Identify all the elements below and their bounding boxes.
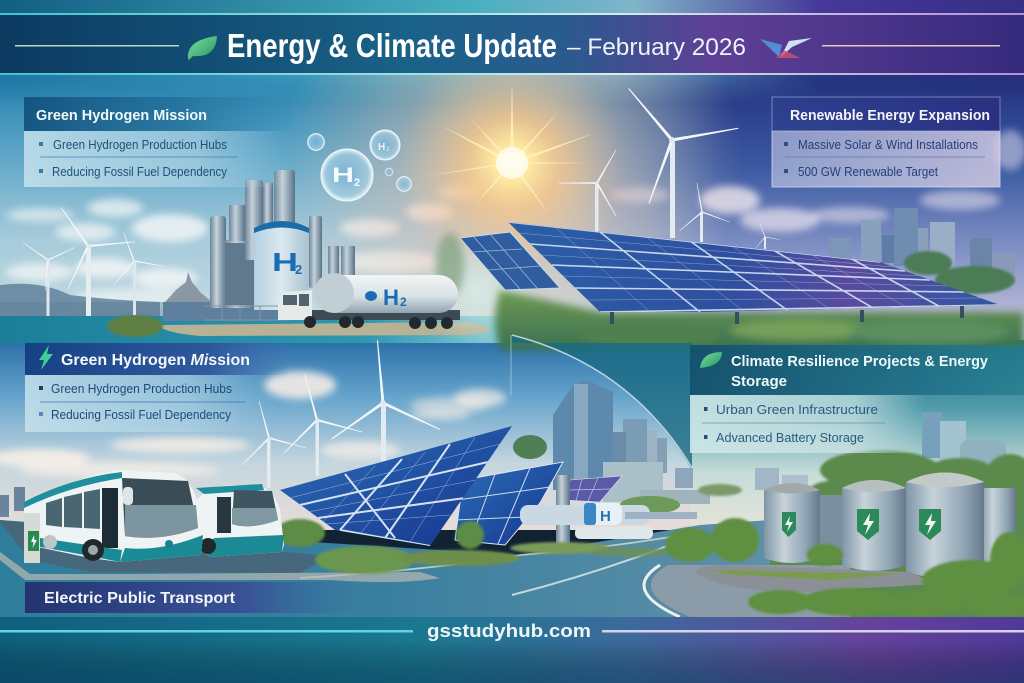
- list item: 500 GW Renewable Target: [798, 165, 938, 179]
- list item: Urban Green Infrastructure: [716, 402, 878, 417]
- clouds: lower left: [0, 371, 506, 478]
- wind turbine group: upper left: [8, 183, 165, 316]
- trees behind solar: top right: [904, 251, 1015, 294]
- icon: lightning bolt: [39, 345, 53, 370]
- sun glow: [298, 75, 729, 316]
- planter platform and shrubs: [665, 518, 1024, 617]
- panel body: [25, 375, 275, 432]
- hydrogen pipeline: [520, 475, 697, 545]
- panel: green hydrogen mission (top): [24, 97, 294, 187]
- ground behind tanks: [770, 480, 1024, 620]
- tank right: [906, 472, 984, 578]
- hydrogen bubbles: H: [332, 164, 354, 187]
- website: gsstudyhub.com: [427, 620, 591, 641]
- city: right: [922, 412, 1006, 472]
- icon: logo mark: [760, 38, 812, 58]
- heading text: Climate Resilience Projects & Energy: [731, 353, 989, 370]
- bus: front: [24, 470, 203, 562]
- hydrogen plant: [163, 170, 355, 321]
- icon: sun with rays: [426, 82, 595, 213]
- city: centre: [513, 380, 808, 514]
- tank left: [764, 483, 820, 563]
- hydrogen bubbles: H: [378, 142, 385, 153]
- footer band: [0, 617, 1024, 683]
- panel: electric public transport: Electric Public Transport: [44, 590, 235, 607]
- panel: renewable energy expansion: [772, 97, 1000, 187]
- background: upper right dusk sky: [592, 78, 1024, 340]
- H2 storage tank: 2: [295, 262, 302, 277]
- trees: right: [698, 450, 1024, 506]
- list item: Massive Solar & Wind Installations: [798, 138, 978, 152]
- pale leafy haze: [418, 235, 538, 345]
- icon: leaf: [188, 36, 217, 60]
- tank middle: [842, 480, 906, 571]
- list item: Green Hydrogen Production Hubs: [53, 138, 227, 152]
- heading text: [731, 353, 989, 390]
- subtitle date: – February 2026: [567, 34, 746, 61]
- icon: EV charging station: [24, 513, 40, 563]
- wind turbine group: top right: [558, 50, 781, 249]
- road and ground: [0, 520, 770, 620]
- header rule left: [15, 45, 179, 46]
- heading text: Renewable Energy Expansion: [790, 108, 990, 124]
- hydrogen tanker truck: [278, 273, 460, 329]
- greenery: lower left: [275, 519, 670, 574]
- header bar: [0, 13, 1024, 75]
- list item: Reducing Fossil Fuel Dependency: [51, 408, 232, 422]
- header: top colour band: [0, 0, 1024, 14]
- hydrogen bubbles: 2: [386, 147, 390, 153]
- heading text: Green Hydrogen Mission: [36, 108, 207, 124]
- battery storage tanks: [764, 472, 1016, 578]
- panel heading bar: [772, 97, 1000, 131]
- background: lower left sky: [0, 340, 692, 530]
- H2 storage tank: [254, 221, 309, 310]
- footer rule right: [602, 630, 1024, 632]
- heading text: Green Hydrogen Mission: [61, 352, 250, 369]
- panel body: [772, 131, 1000, 187]
- panel heading bar: [690, 345, 1024, 395]
- list item: Reducing Fossil Fuel Dependency: [52, 165, 228, 179]
- solar array: top right: [460, 222, 1000, 324]
- panel: climate resilience and energy storage: [690, 345, 1024, 453]
- clouds: upper right: [610, 130, 1024, 232]
- turbines: lower: [227, 335, 441, 488]
- clouds: upper left: [6, 185, 482, 308]
- header rule right: [822, 45, 1000, 46]
- hydrogen tanker truck: 2: [400, 295, 407, 309]
- panel heading bar: [24, 97, 294, 131]
- city skyline: top right: [829, 208, 1015, 274]
- greenery under solar: top right: [436, 233, 1024, 350]
- hydrogen tanker truck: H: [383, 285, 399, 310]
- list item: Green Hydrogen Production Hubs: [51, 382, 232, 396]
- solar array: lower right back: [455, 462, 622, 545]
- background: lower right sky: [690, 340, 1024, 530]
- panel body: [690, 395, 925, 453]
- H2 storage tank: H: [272, 247, 298, 277]
- background: upper sky: [0, 75, 1024, 345]
- band under header: [0, 75, 1024, 99]
- list item: Advanced Battery Storage: [716, 430, 864, 445]
- water and shoreline: upper left: [0, 284, 520, 343]
- panel: green hydrogen mission (lower): [25, 343, 290, 432]
- panel body: [24, 131, 290, 187]
- heading text: Storage: [731, 373, 787, 390]
- bus: rear: [196, 484, 284, 557]
- hydrogen bubbles: 2: [354, 177, 360, 189]
- panel: electric public transport: [25, 582, 365, 613]
- hydrogen pipeline: H: [600, 508, 611, 525]
- hydrogen bubbles: [308, 130, 412, 201]
- dome arc: [512, 335, 692, 470]
- title: Energy & Climate Update: [227, 27, 557, 64]
- solar array: lower front: [280, 426, 512, 546]
- left distant city: [0, 487, 25, 517]
- icon: leaf: [700, 352, 722, 368]
- footer rule left: [0, 630, 413, 632]
- parking area and left road: [0, 520, 330, 573]
- panel heading bar: [25, 343, 290, 375]
